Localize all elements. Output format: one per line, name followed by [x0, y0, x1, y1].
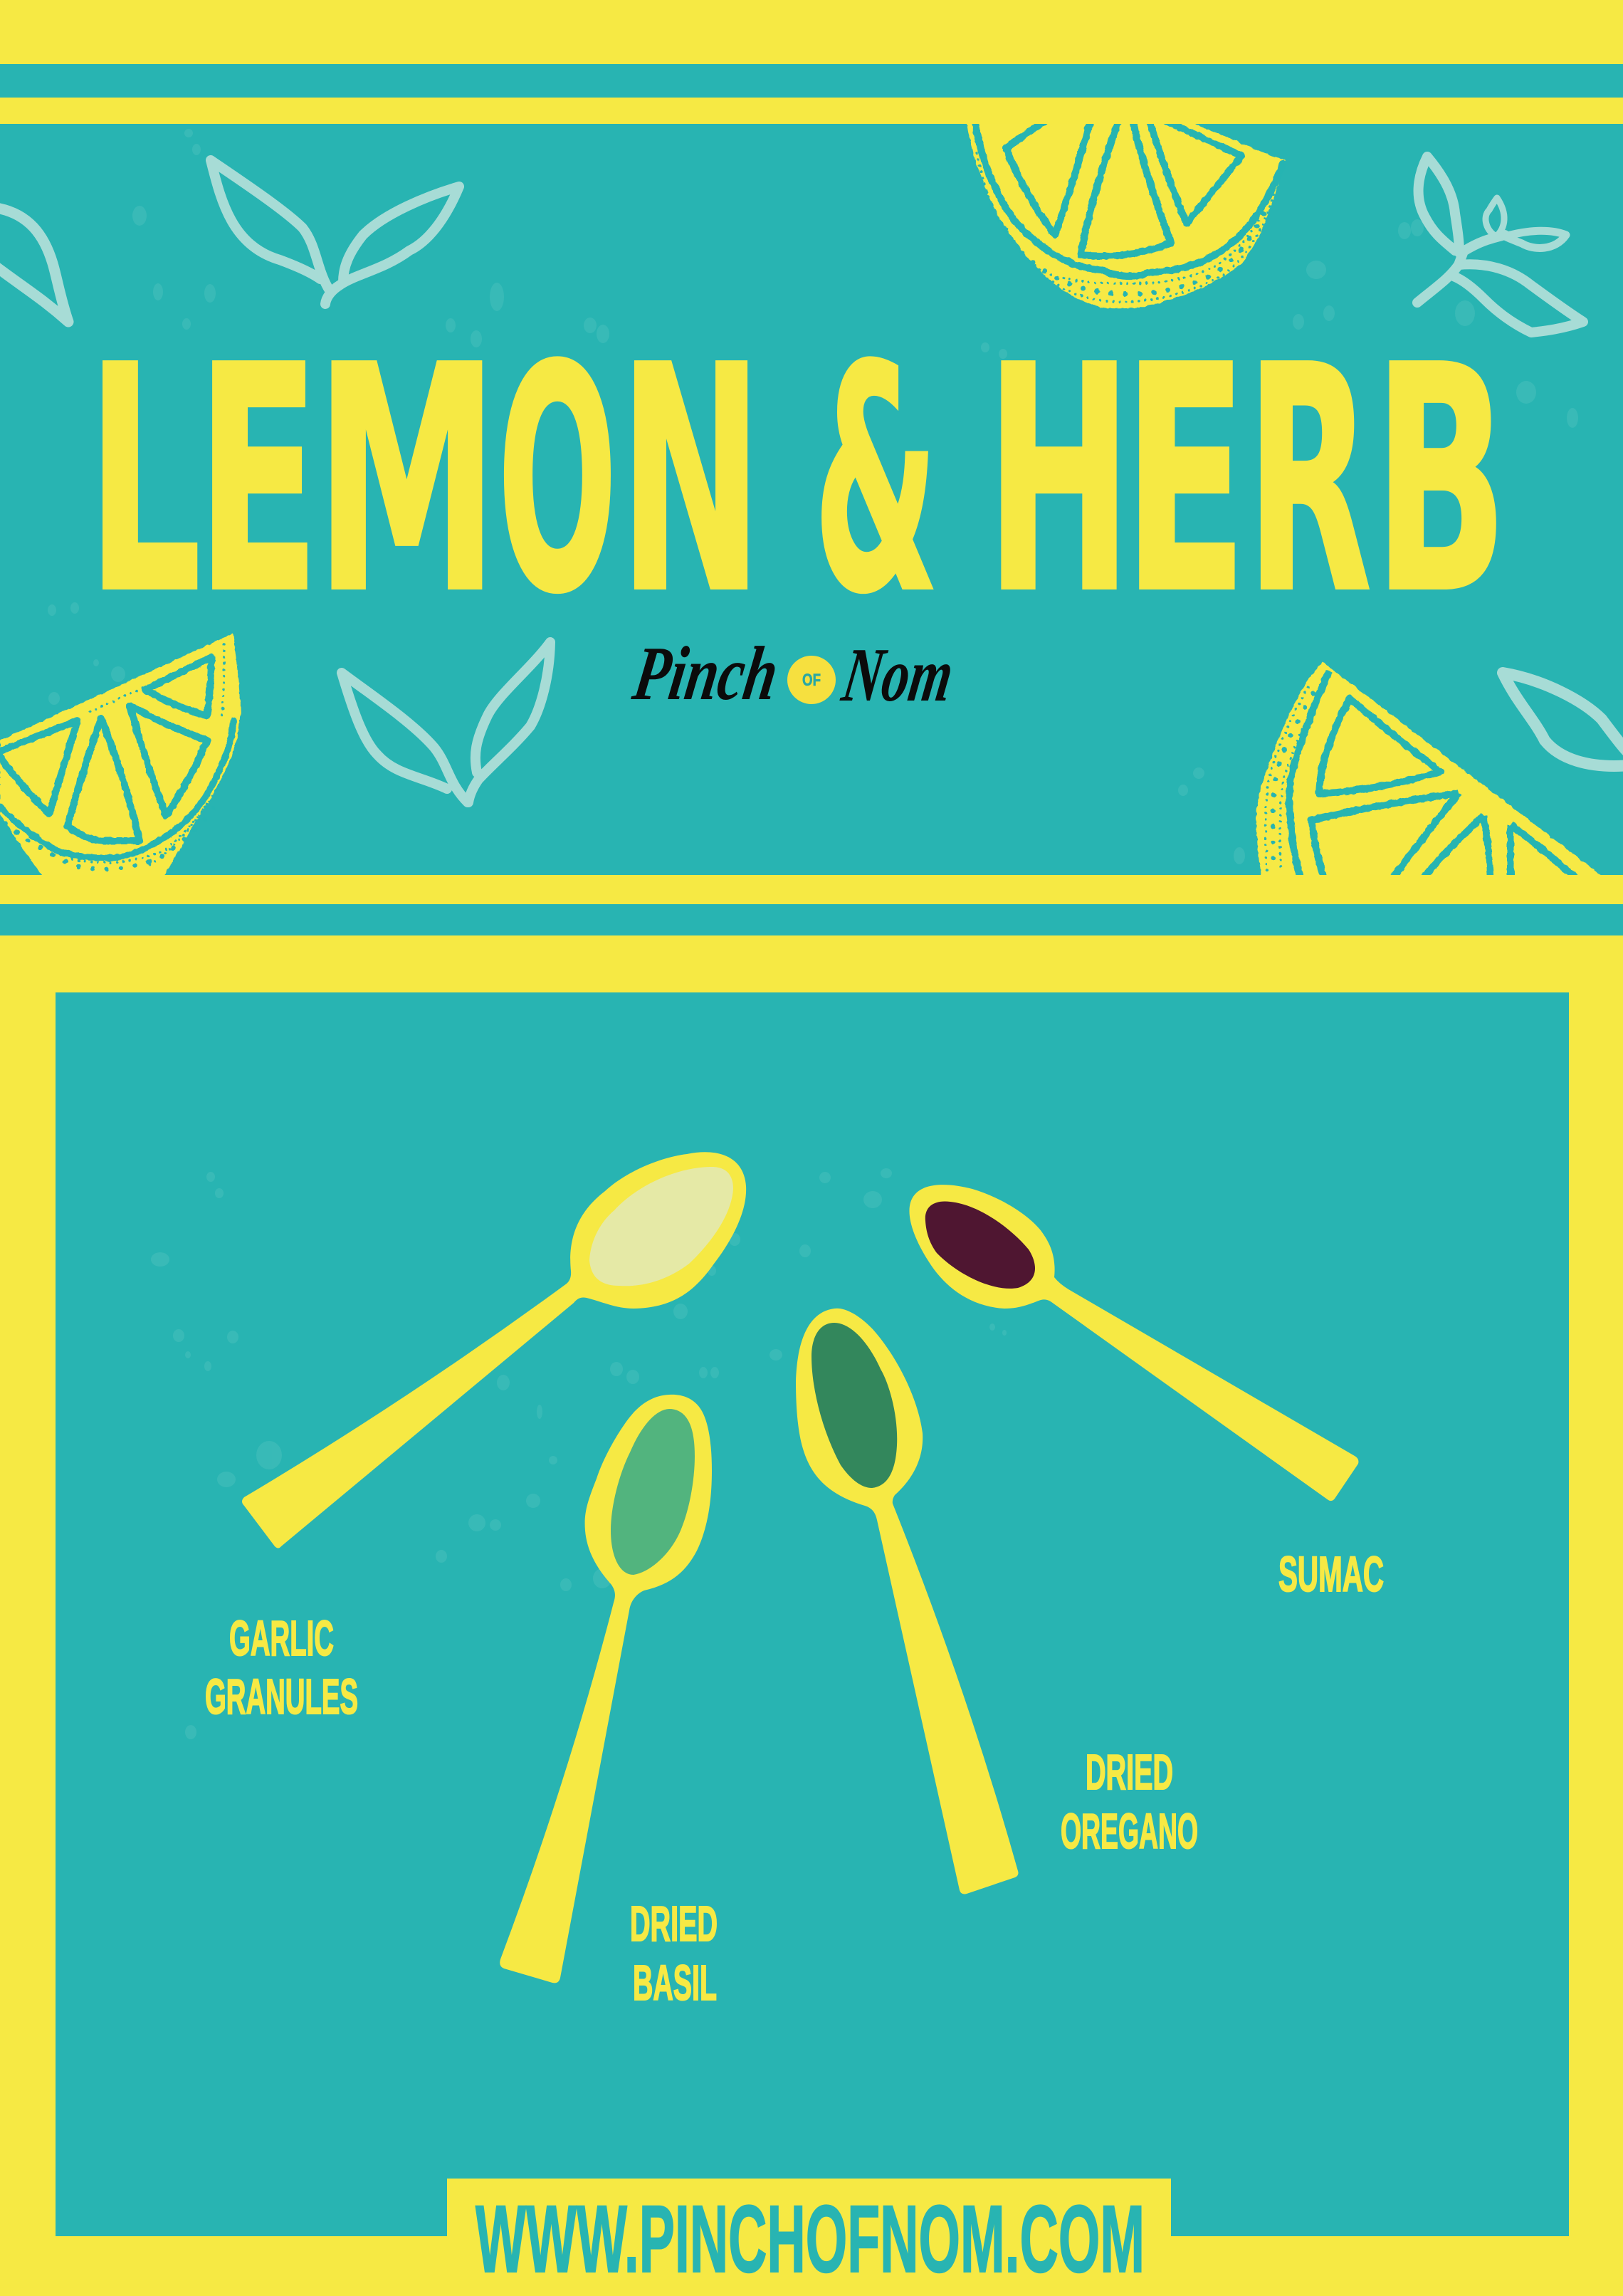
logo badge: of [787, 656, 836, 704]
icon: leaf right edge [1503, 673, 1623, 766]
logo badge: of: OF [802, 671, 821, 690]
icon: leaf pair bottom left [342, 642, 550, 802]
icon: partial leaf far left [0, 208, 68, 322]
label: garlic granules [205, 1610, 358, 1724]
logo: Pinch of Nom [627, 631, 959, 718]
lower hero yellow band [0, 875, 1623, 904]
label: dried basil: DRIED [630, 1896, 718, 1951]
title: M [315, 300, 498, 661]
title: R [1246, 300, 1372, 661]
footer tab with website [447, 2179, 1171, 2296]
label: garlic granules: GRANULES [205, 1669, 358, 1724]
basil in bowl [611, 1409, 695, 1575]
spoon: garlic granules [242, 1152, 746, 1548]
spoon: dried oregano [796, 1309, 1018, 1894]
label: dried basil: BASIL [633, 1955, 717, 2011]
label: dried oregano: OREGANO [1061, 1803, 1198, 1859]
label: dried basil [630, 1896, 718, 2011]
title: N [619, 300, 762, 661]
label: garlic granules: GARLIC [229, 1610, 334, 1666]
label: sumac: SUMAC [1278, 1546, 1384, 1602]
spoon: sumac [909, 1185, 1358, 1501]
title: H [986, 300, 1132, 661]
icon: lemon slice bottom left [0, 634, 241, 883]
label: dried oregano: DRIED [1086, 1744, 1173, 1800]
title: E [196, 300, 320, 661]
oregano in bowl [812, 1323, 897, 1488]
logo word: Nom: Nom [836, 632, 959, 718]
sumac in bowl [925, 1201, 1035, 1289]
label: dried oregano [1061, 1744, 1198, 1859]
title: L [87, 300, 201, 661]
icon: herb sprig top right [1417, 157, 1583, 332]
title: O [498, 300, 617, 661]
spoon: dried basil [500, 1395, 712, 1983]
icon: lemon slice bottom right [1256, 662, 1611, 883]
title: & [814, 300, 938, 661]
garlic powder in bowl [589, 1167, 733, 1286]
icon: lemon slice top [961, 107, 1286, 308]
top yellow band [0, 0, 1623, 64]
second yellow band [0, 98, 1623, 124]
panel: yellow frame around spoons [0, 935, 1623, 2296]
logo word: Pinch: Pinch [627, 631, 784, 716]
title: E [1123, 300, 1247, 661]
icon: leaf pair top left [211, 160, 459, 304]
title: B [1374, 300, 1508, 661]
